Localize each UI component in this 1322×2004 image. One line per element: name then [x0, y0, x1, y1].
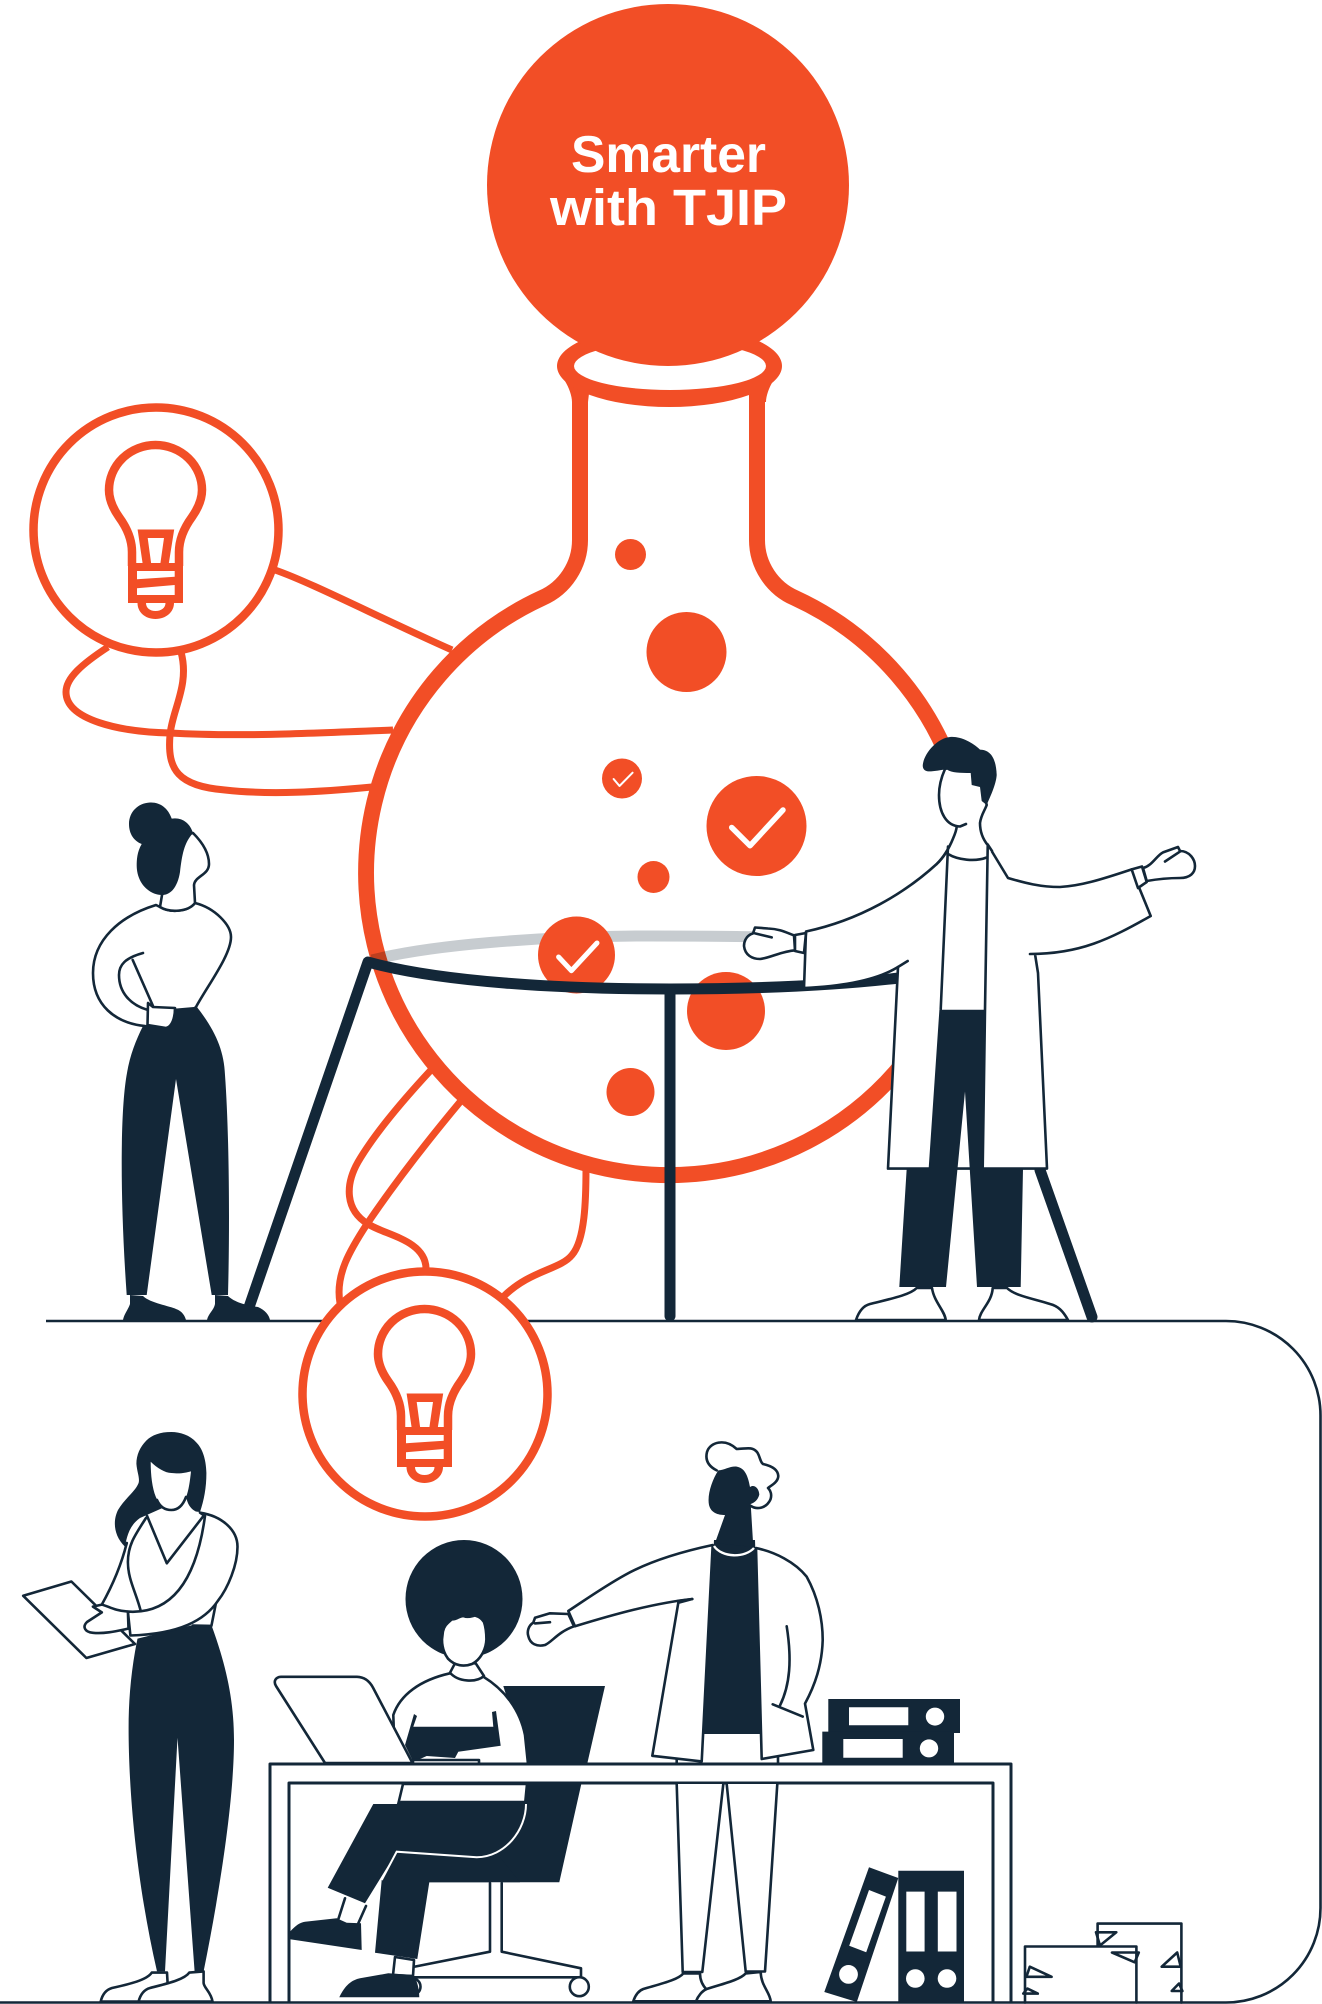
- waist: [193, 1603, 216, 1626]
- laptop: [275, 1677, 412, 1763]
- floor and shelf outline: [0, 1321, 1321, 2002]
- pant legs: [677, 1784, 723, 1972]
- front leg: [328, 1801, 525, 1903]
- icon: light bulb: [109, 445, 202, 619]
- face: [151, 1462, 191, 1510]
- person: man in lab coat: [744, 737, 1195, 1320]
- top outline: [102, 1516, 204, 1612]
- right hand: [1143, 847, 1195, 881]
- back leg: [375, 1852, 520, 1959]
- person: seated man lower body and chair: [290, 1782, 589, 1997]
- shoes: [101, 1973, 168, 2002]
- bottom binder: [822, 1732, 954, 1763]
- curly hair outline: [706, 1442, 778, 1508]
- face: [160, 833, 209, 911]
- gray back rim of stand: [372, 936, 760, 960]
- binders under desk: [824, 1867, 964, 2003]
- top binder: [828, 1699, 960, 1733]
- sweater stripe: [405, 1711, 501, 1762]
- connector lines between bulbs and flask: [66, 570, 586, 1303]
- shoes: [123, 1295, 186, 1320]
- hair: [923, 737, 997, 805]
- flask body: [366, 395, 971, 1175]
- flask mouth ring: [557, 325, 782, 407]
- hand: [528, 1613, 574, 1646]
- head: [709, 1467, 759, 1547]
- title circle: with TJIP: [549, 179, 787, 236]
- person: woman with bun: [93, 802, 270, 1320]
- shoes: [856, 1288, 946, 1320]
- sweater: [393, 1673, 528, 1764]
- coat stubs above desk: [677, 1756, 778, 1764]
- flask: [366, 325, 971, 1175]
- neck backing: [948, 818, 992, 852]
- tilted binder: [824, 1867, 898, 2002]
- person: standing colleague in coat: [528, 1442, 823, 2001]
- shirt: [703, 1540, 762, 1734]
- ankles: [338, 1898, 366, 1923]
- collar: [714, 1546, 754, 1555]
- middle check bubble: [538, 916, 615, 994]
- bulb circle top left: [34, 408, 278, 652]
- coat: [804, 827, 1151, 1169]
- arm: [128, 1513, 238, 1636]
- binders on desk: [822, 1699, 960, 1763]
- chair base: [413, 1883, 581, 1977]
- neck and face: [939, 760, 988, 845]
- pants: [129, 1625, 234, 1971]
- neck: [147, 1495, 204, 1563]
- sweater: [93, 903, 231, 1027]
- person: woman with clipboard: [23, 1432, 238, 2002]
- laptop and seated man upper body: [275, 1540, 528, 1764]
- large check bubble: [706, 776, 806, 876]
- hand: [85, 1605, 128, 1633]
- shoes: [633, 1973, 707, 2001]
- icon: light bulb: [378, 1309, 471, 1483]
- clipboard: [23, 1582, 135, 1658]
- bulb circle bottom: [302, 1272, 548, 1516]
- upright binder: [898, 1871, 964, 2003]
- title: Smarter: [571, 126, 766, 184]
- left hand: [744, 928, 795, 959]
- chair wheels: [570, 1977, 589, 1996]
- face: [442, 1616, 486, 1666]
- top fill: [102, 1516, 216, 1630]
- chair seat back: [400, 1782, 582, 1882]
- desk: [270, 1764, 1011, 2002]
- hair: [129, 802, 193, 895]
- person: seated man chair back: [503, 1686, 605, 1766]
- shoes: [290, 1918, 362, 1950]
- title circle: [487, 4, 849, 366]
- bubbles: [538, 539, 806, 1116]
- chair post: [490, 1873, 502, 1952]
- afro hair: [406, 1540, 522, 1658]
- pants: [899, 1010, 1023, 1287]
- cardboard boxes: [1023, 1924, 1182, 2002]
- collar: [450, 1663, 484, 1681]
- hair: [115, 1432, 206, 1547]
- tripod stand: [246, 962, 1092, 1317]
- coat left panel and arm: [568, 1545, 713, 1761]
- flask neck flare: [563, 378, 775, 402]
- pants: [122, 1007, 229, 1295]
- small check bubble: [602, 758, 642, 798]
- thigh white strip: [398, 1784, 527, 1805]
- coat right panel and arm: [756, 1548, 823, 1759]
